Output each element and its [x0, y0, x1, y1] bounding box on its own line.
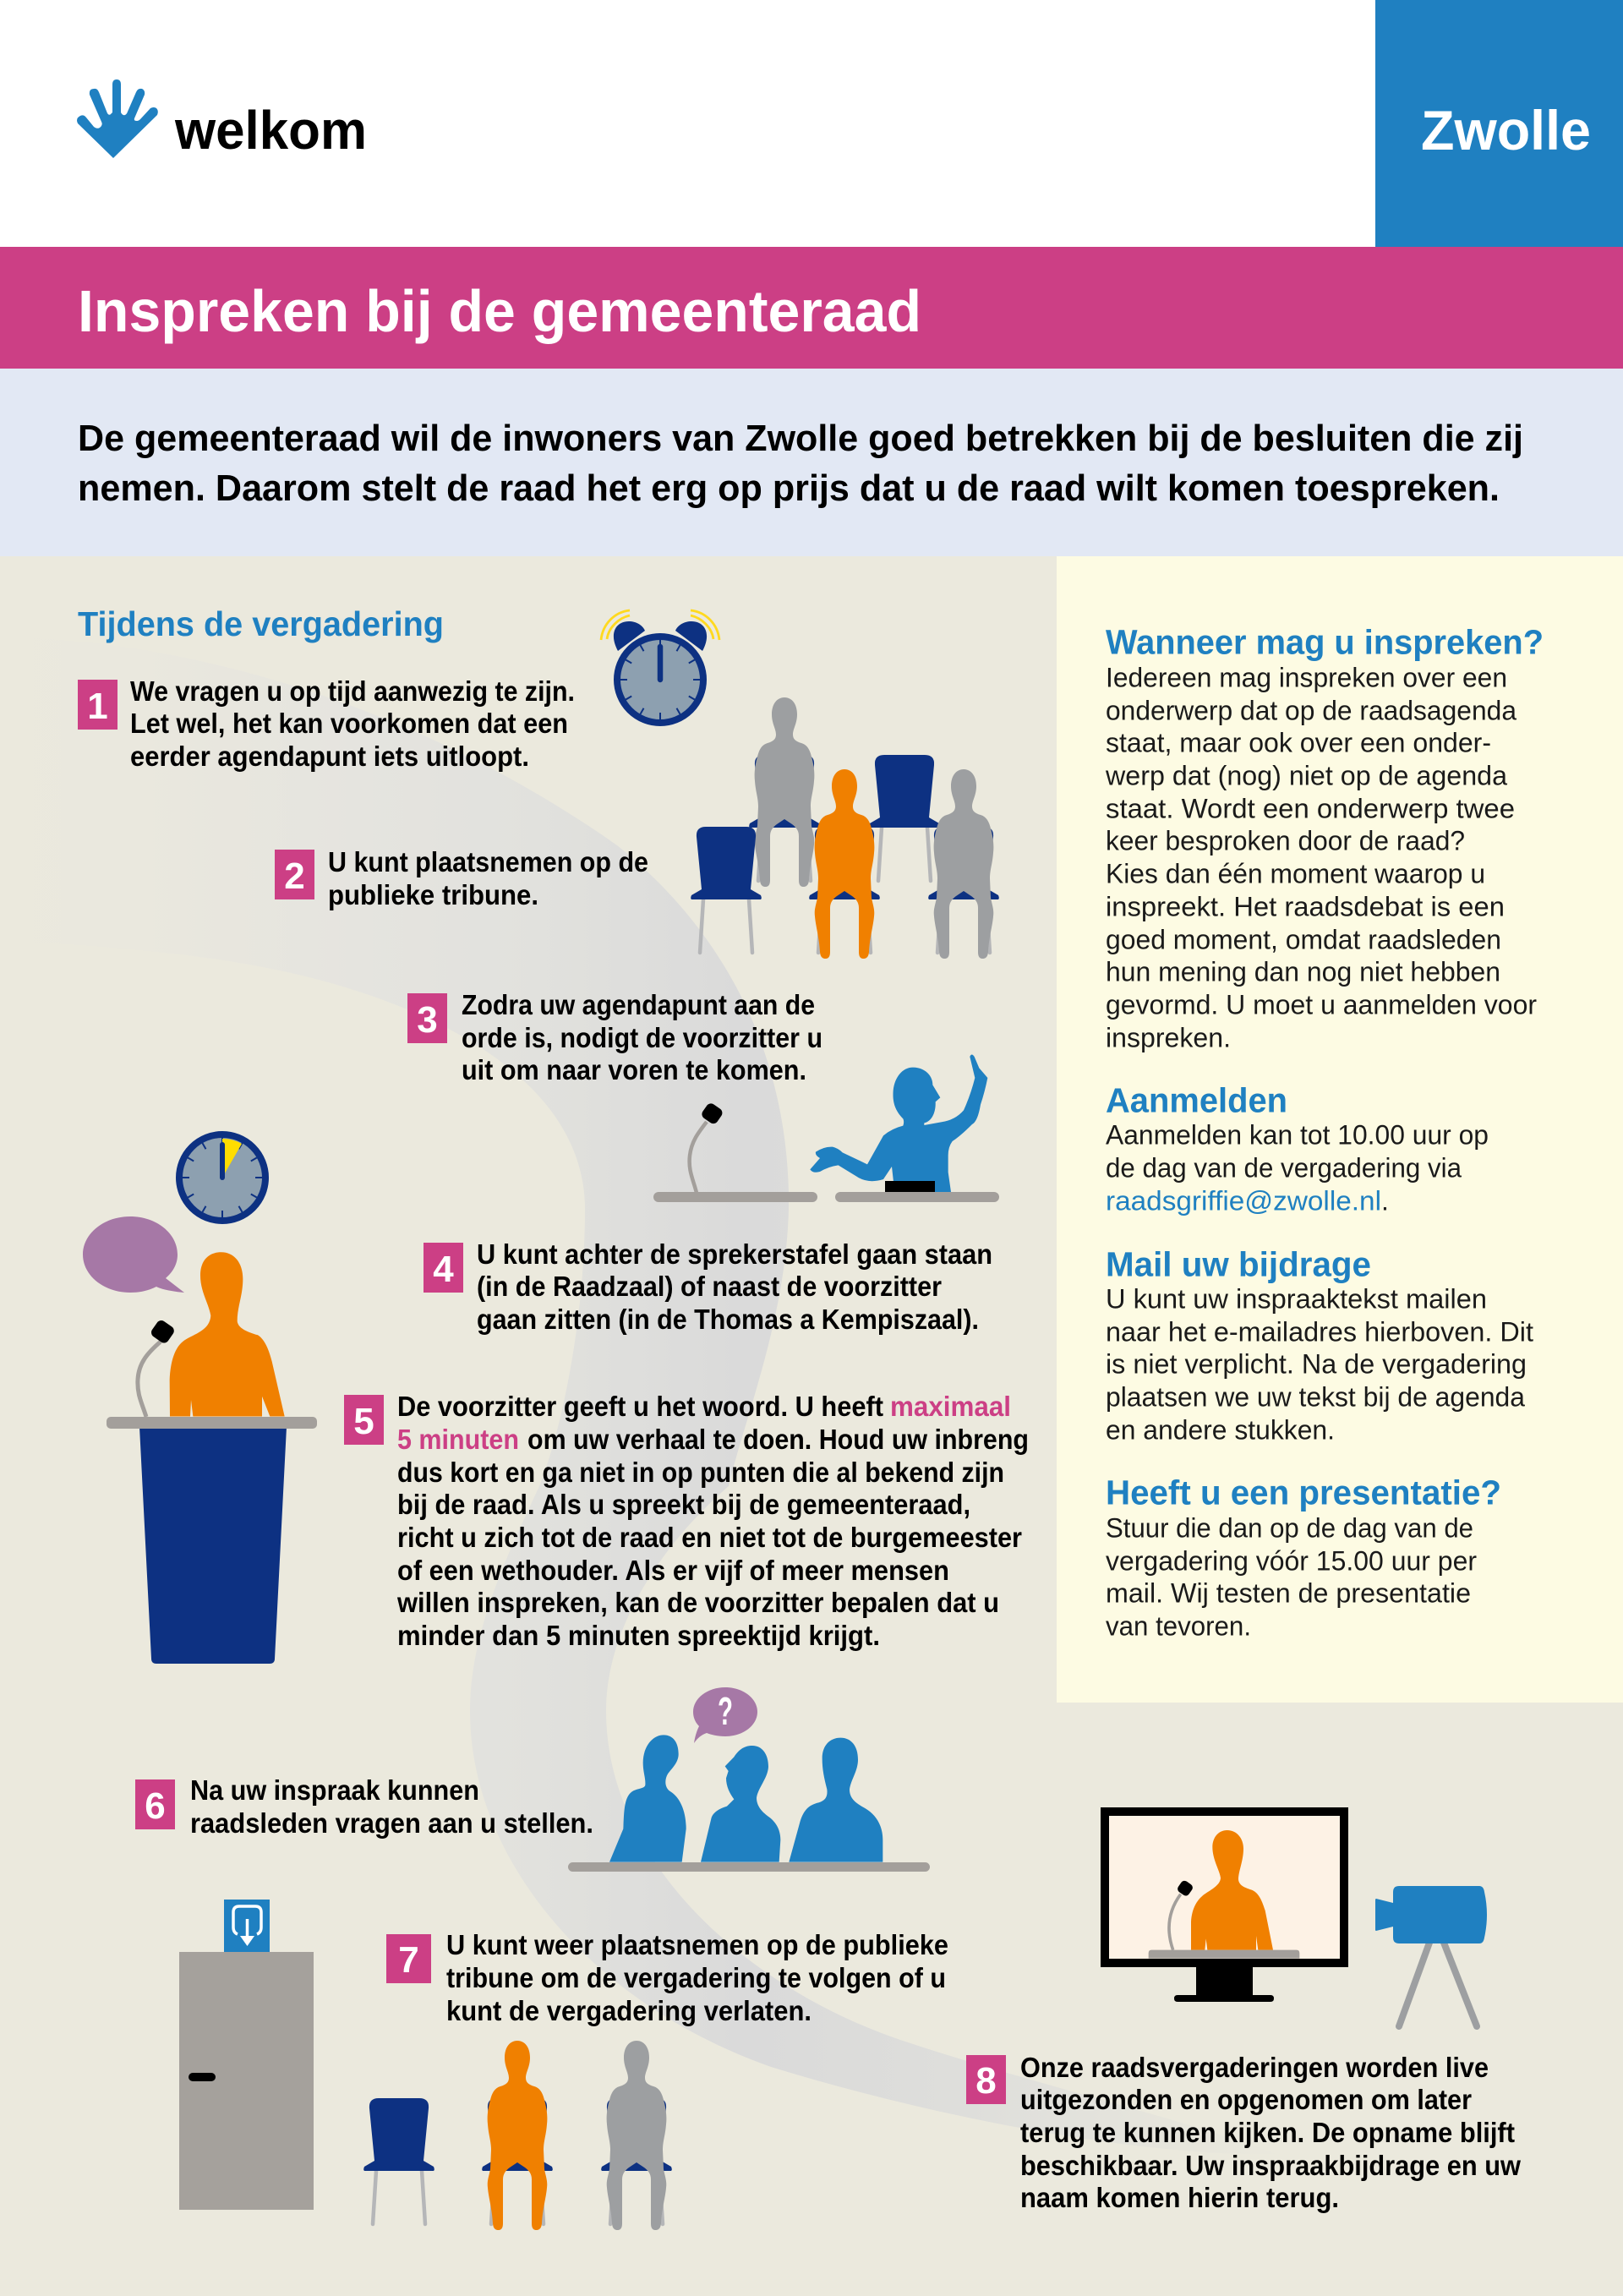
text step 3: uit om naar voren te komen.: [462, 1054, 806, 1085]
text block: Wanneer: Iedereen mag inspreken over een: [1106, 663, 1507, 693]
icon: speech bubble: [83, 1216, 184, 1293]
text block: Mail: plaatsen we uw tekst bij de agenda: [1106, 1381, 1525, 1412]
text step 5: maximaal: [890, 1391, 1011, 1422]
badge 3: [407, 993, 447, 1043]
badge 8: [966, 2055, 1006, 2104]
text step 8: naam komen hierin terug.: [1020, 2182, 1339, 2213]
text block: Aanmelden: raadsgriffie@zwolle.nl: [1106, 1185, 1381, 1216]
text step 1: We vragen u op tijd aanwezig te zijn.: [130, 675, 575, 707]
step 6: [135, 1774, 593, 1839]
text step 4: gaan zitten (in de Thomas a Kempiszaal).: [477, 1304, 979, 1335]
intro band: nemen. Daarom stelt de raad het erg op prijs dat u de raad wilt komen toespreken.: [78, 467, 1500, 509]
logo wordmark: welkom: [174, 100, 367, 161]
heading: Wanneer mag u inspreken: Wanneer mag u inspreken?: [1106, 622, 1544, 661]
badge 5: 5: [353, 1401, 374, 1442]
step 3: [407, 989, 822, 1085]
text block: Wanneer: gevormd. U moet u aanmelden voor: [1106, 989, 1537, 1020]
intro band: De gemeenteraad wil de inwoners van Zwolle goed betrekken bij de besluiten die zij: [78, 418, 1523, 459]
text step 8: terug te kunnen kijken. De opname blijft: [1020, 2117, 1515, 2148]
text step 8: Onze raadsvergaderingen worden live: [1020, 2052, 1489, 2083]
badge 5: [344, 1395, 384, 1445]
text step 3: [462, 989, 822, 1085]
text block: Aanmelden: [1106, 1119, 1489, 1216]
text block: Aanmelden: .: [1381, 1185, 1389, 1216]
text block: Wanneer: onderwerp dat op de raadsagenda: [1106, 695, 1516, 725]
logo: welkom: [77, 79, 367, 161]
heading: Heeft u een presentatie: Heeft u een presentatie?: [1106, 1473, 1501, 1512]
text step 1: eerder agendapunt iets uitloopt.: [130, 741, 529, 772]
icon: speaking time clock: [179, 1134, 265, 1221]
city tab: Zwolle: Zwolle: [1421, 99, 1591, 161]
illustration: speaker at lectern: [107, 1252, 317, 1664]
text step 6: raadsleden vragen aan u stellen.: [190, 1807, 593, 1839]
step 8: [966, 2052, 1521, 2213]
text block: Mail: U kunt uw inspraaktekst mailen: [1106, 1283, 1487, 1314]
step 7: [386, 1929, 948, 2026]
text step 5: om uw verhaal te doen. Houd uw inbreng: [527, 1424, 1029, 1455]
panel: information sidebar: [1057, 556, 1623, 1703]
text step 5: bij de raad. Als u spreekt bij de gemeenteraad,: [397, 1489, 970, 1520]
illustration: public gallery with chairs: [691, 697, 999, 959]
heading: Tijdens de vergadering: Tijdens de vergadering: [78, 604, 444, 643]
step 4: [424, 1238, 992, 1335]
text block: Wanneer: werp dat (nog) niet op de agenda: [1105, 761, 1507, 791]
text step 5: willen inspreken, kan de voorzitter bepalen dat u: [396, 1587, 999, 1618]
text step 5: De voorzitter geeft u het woord. U heeft: [397, 1391, 883, 1422]
text block: Wanneer: staat. Wordt een onderwerp twee: [1106, 793, 1515, 823]
badge 2: [275, 850, 314, 899]
door: [179, 1952, 314, 2210]
text block: presentatie: [1106, 1513, 1477, 1642]
badge 2: 2: [284, 856, 305, 897]
badge 1: [78, 680, 117, 730]
icon: hand: [77, 79, 158, 158]
text block: Wanneer: inspreekt. Het raadsdebat is een: [1106, 891, 1505, 921]
illustration: exit door: [179, 1900, 314, 2210]
text step 5: minder dan 5 minuten spreektijd krijgt.: [397, 1620, 880, 1651]
text step 7: kunt de vergadering verlaten.: [446, 1995, 812, 2026]
background swoosh: [0, 637, 1276, 2154]
text block: Aanmelden: de dag van de vergadering via: [1106, 1153, 1462, 1184]
text step 6: [190, 1774, 593, 1839]
illustration: microphone on speaker table: [653, 1102, 817, 1202]
badge 7: [386, 1934, 431, 1983]
text step 7: tribune om de vergadering te volgen of u: [446, 1962, 946, 1993]
text block: presentatie: van tevoren.: [1106, 1611, 1251, 1642]
badge 6: [135, 1779, 175, 1829]
text step 6: Na uw inspraak kunnen: [190, 1774, 479, 1806]
text block: Mail: is niet verplicht. Na de vergadering: [1106, 1349, 1527, 1380]
step 2: [275, 846, 648, 910]
text step 5: of een wethouder. Als er vijf of meer mensen: [397, 1555, 949, 1586]
badge 4: 4: [433, 1249, 454, 1290]
illustration: council members asking questions: [568, 1687, 930, 1872]
text block: Wanneer: keer besproken door de raad?: [1106, 825, 1465, 856]
question bubble: [693, 1687, 757, 1743]
text step 5: dus kort en ga niet in op punten die al bekend zijn: [397, 1457, 1004, 1488]
badge 4: [424, 1243, 463, 1293]
badge 7: 7: [398, 1939, 419, 1981]
text block: Wanneer: goed moment, omdat raadsleden: [1106, 925, 1501, 955]
text step 3: Zodra uw agendapunt aan de: [462, 989, 815, 1020]
text step 8: [1020, 2052, 1521, 2213]
question bubble: ?: [718, 1689, 733, 1733]
text step 4: U kunt achter de sprekerstafel gaan staan: [477, 1238, 992, 1270]
text block: Aanmelden: Aanmelden kan tot 10.00 uur op: [1106, 1119, 1489, 1150]
text block: Wanneer: staat, maar ook over een onder-: [1106, 727, 1491, 757]
text step 4: [477, 1238, 992, 1335]
icon: video camera on tripod: [1375, 1886, 1487, 2026]
icon: alarm clock: [601, 610, 719, 723]
text step 3: orde is, nodigt de voorzitter u: [462, 1022, 822, 1053]
text block: Mail: [1106, 1283, 1533, 1446]
title band: [0, 247, 1623, 369]
illustration: seated row after speaking: [363, 2041, 672, 2230]
city tab: Zwolle: [1375, 0, 1623, 247]
text block: Mail: naar het e-mailadres hierboven. Dit: [1106, 1317, 1533, 1348]
text step 1: Let wel, het kan voorkomen dat een: [130, 708, 568, 739]
exit sign: [224, 1900, 270, 1952]
badge 3: 3: [417, 999, 438, 1041]
text step 5: 5 minuten: [397, 1424, 519, 1455]
door handle: [189, 2073, 216, 2081]
illustration: monitor showing speaker: [1101, 1807, 1348, 2002]
badge 1: 1: [87, 686, 108, 727]
illustration: chair of the council raising hand: [810, 1054, 999, 1202]
text step 5: [396, 1391, 1029, 1651]
text block: Wanneer: [1105, 663, 1537, 1053]
badge 6: 6: [145, 1785, 166, 1827]
title band: Inspreken bij de gemeenteraad: [78, 278, 921, 344]
text block: presentatie: vergadering vóór 15.00 uur per: [1106, 1545, 1477, 1576]
text block: Wanneer: inspreken.: [1106, 1023, 1231, 1053]
text step 2: publieke tribune.: [328, 879, 538, 910]
text block: presentatie: Stuur die dan op de dag van de: [1106, 1513, 1473, 1544]
text step 8: beschikbaar. Uw inspraakbijdrage en uw: [1020, 2150, 1521, 2181]
step 1: [78, 675, 575, 772]
text step 2: U kunt plaatsnemen op de: [328, 846, 648, 877]
text step 5: richt u zich tot de raad en niet tot de burgemeester: [397, 1522, 1022, 1553]
header: white band: [0, 0, 1375, 247]
text step 7: [446, 1929, 948, 2026]
text step 8: uitgezonden en opgenomen om later: [1020, 2084, 1472, 2115]
text step 2: [328, 846, 648, 910]
text step 7: U kunt weer plaatsnemen op de publieke: [446, 1929, 948, 1960]
text block: Wanneer: Kies dan één moment waarop u: [1106, 859, 1485, 889]
text block: Wanneer: hun mening dan nog niet hebben: [1106, 957, 1500, 987]
heading: Aanmelden: Aanmelden: [1106, 1080, 1287, 1119]
badge 8: 8: [975, 2060, 997, 2102]
text block: presentatie: mail. Wij testen de presentatie: [1106, 1577, 1471, 1608]
step 5: [344, 1391, 1029, 1651]
intro band: [0, 369, 1623, 556]
text block: Mail: en andere stukken.: [1106, 1415, 1335, 1446]
text step 4: (in de Raadzaal) of naast de voorzitter: [477, 1271, 942, 1302]
heading: Mail uw bijdrage: Mail uw bijdrage: [1106, 1244, 1371, 1283]
text step 1: [130, 675, 575, 772]
